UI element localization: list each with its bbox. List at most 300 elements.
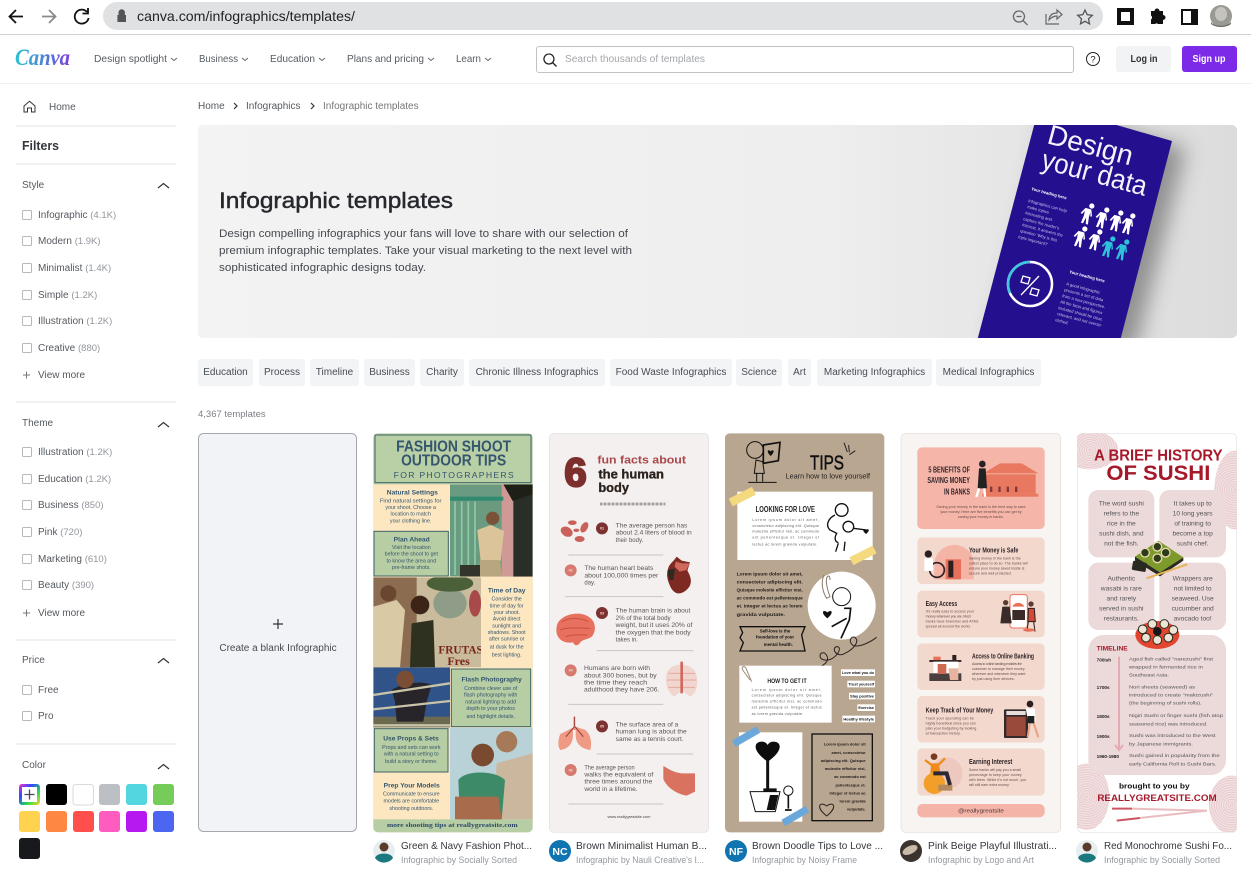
row: access to online banking: wherever and whenever they want <box>972 672 1025 676</box>
flyer body text: topic important?' <box>1018 234 1049 247</box>
flyer headline: Design <box>1044 119 1137 171</box>
tag list: Healthy lifestyle <box>843 717 874 721</box>
fact text: avocado too! <box>1174 615 1212 622</box>
category chips: Process <box>264 367 300 378</box>
card: how to get it: molestie efficitur nisi, ac commodo <box>752 700 822 704</box>
flyer body text: presents a set of data <box>1064 287 1105 303</box>
timeline: wrapped in fermented rice in <box>1129 664 1203 670</box>
fact text: It takes up to <box>1174 500 1212 507</box>
menu items: Learn <box>456 53 481 65</box>
icon: help: ? <box>1090 54 1096 66</box>
filter group: style: Creative (880) <box>38 343 100 354</box>
flyer body text: interest, it answers the <box>1022 222 1064 238</box>
flyer body text: included should be clear, <box>1058 305 1104 322</box>
fact text: The average person <box>584 765 635 771</box>
caption: card 1: Infographic by Socially Sorted <box>401 855 517 866</box>
caption: card 5: Red Monochrome Sushi Fo... <box>1104 840 1232 852</box>
row: your money is safe: secure and well protected. <box>969 571 1012 575</box>
body text block <box>737 572 803 617</box>
fact text: not the fish. <box>1104 540 1139 547</box>
card: heart plant <box>739 732 802 822</box>
sidebar filters <box>16 101 176 859</box>
row: your money is safe: Saving money in the bank is the <box>969 556 1021 560</box>
category chips: Art <box>793 367 806 378</box>
arrow <box>1115 657 1123 750</box>
fact text: refers to the <box>1104 510 1139 517</box>
hero heading: Infographic templates <box>219 188 453 213</box>
tip text: Plan Ahead <box>394 536 430 543</box>
icon: zoom out <box>1013 11 1028 25</box>
photo: man on street <box>450 484 533 577</box>
category chips: Food Waste Infographics <box>616 367 726 378</box>
flyer body text: Your heading here <box>1069 269 1106 284</box>
timeline: introduced to create "makizushi" <box>1129 692 1213 698</box>
number badges: 06 <box>569 768 573 772</box>
tip text: location to match <box>391 512 431 518</box>
filter group: price <box>22 655 169 722</box>
category chips: Charity <box>426 367 458 378</box>
framed note: lorem gravida <box>840 798 866 803</box>
hero block: Saving your money in the bank is the best way to save <box>936 505 1026 509</box>
flyer body text: interesting and <box>1025 210 1053 222</box>
illustration: woman <box>976 461 987 497</box>
fact text <box>1099 500 1214 622</box>
fact text: sushi chef. <box>1177 540 1209 547</box>
row: earning interest: with them. While it's not much, you <box>969 778 1026 782</box>
menu items: Design spotlight <box>94 53 167 65</box>
avatar <box>1210 5 1232 27</box>
website: www.reallygreatsite.com <box>608 814 651 819</box>
caption: card 3 <box>725 840 883 866</box>
row: earning interest: Some banks will pay you a small <box>969 768 1021 772</box>
tip text: Prep Your Models <box>384 783 440 790</box>
icon: forward arrow <box>42 10 56 23</box>
fact text: human lung is about the <box>616 730 687 736</box>
photo: woman on railing <box>373 667 450 727</box>
tip text: best lighting. <box>492 653 522 659</box>
breadcrumb: Home <box>198 101 225 112</box>
template count: 4,367 templates <box>198 409 266 420</box>
tip text: Communicate to ensure <box>383 791 440 797</box>
heading: TIPS <box>810 451 844 474</box>
flyer headline <box>1039 125 1146 196</box>
row: easy access: Easy Access <box>926 599 957 608</box>
card: how to get it: est pellentesque et. Integer et lectus <box>752 705 822 709</box>
tip text: Combine clever use of <box>464 686 518 692</box>
timeline: 1700s <box>1097 685 1110 690</box>
row: your money is safe <box>917 537 1045 584</box>
card: how to get it: consectetur adipiscing elit. Quisque <box>752 694 822 698</box>
framed note <box>812 734 872 821</box>
framed note: molestie efficitur nisi, <box>825 766 866 771</box>
number badges: 03 <box>600 611 604 615</box>
flyer headline: your data <box>1038 144 1151 202</box>
fact text: Humans are born with <box>584 666 650 672</box>
icon: back arrow <box>10 10 23 23</box>
tip text: models are comfortable <box>383 799 439 805</box>
photo: couple by mural <box>373 575 483 668</box>
tip text: Time of Day <box>488 588 526 595</box>
hero block: SAVING MONEY <box>927 476 970 485</box>
tip text: Use Props & Sets <box>383 736 439 743</box>
row: earning interest <box>917 748 1045 796</box>
filter group: theme: View more <box>38 608 85 619</box>
body text block: ac commodo est pellentesque <box>737 596 803 601</box>
fact text: The surface area of a <box>616 723 679 729</box>
timeline: Aged fish called "narezushi" first <box>1129 657 1214 663</box>
ribbon note: mental health. <box>764 642 793 647</box>
heading <box>786 451 870 481</box>
framed note: Integer et lectus ac <box>830 790 866 795</box>
heading: body <box>598 481 629 495</box>
card: looking for love: Lorem ipsum dolor sit amet, <box>752 518 819 522</box>
caption: card 1: Green & Navy Fashion Phot... <box>401 840 532 852</box>
corner patterns <box>1077 434 1237 832</box>
icon: side panel <box>1181 9 1198 25</box>
illustration: ribcage <box>666 662 697 697</box>
card: how to get it: Lorem ipsum dolor sit amet, <box>752 688 822 692</box>
tip text: pre-frame shots. <box>392 565 431 571</box>
search box <box>536 46 1074 72</box>
fact text: about 300 bones, but by <box>584 673 657 679</box>
filter group: style: View more <box>38 370 85 381</box>
tip text: Consider the <box>492 597 522 603</box>
url: canva.com/infographics/templates/ <box>137 8 355 24</box>
filter group: theme: Illustration (1.2K) <box>38 447 112 458</box>
icon: people pictogram <box>1071 201 1136 261</box>
filter group: theme <box>22 418 169 619</box>
row: access to online banking: Access to Online Banking <box>972 651 1034 660</box>
tag list: Trust yourself <box>848 682 875 686</box>
menu items <box>94 53 491 65</box>
filter group: style: Infographic (4.1K) <box>38 210 116 221</box>
template 5: history of sushi <box>1077 433 1237 832</box>
illustration: blood cells <box>559 520 590 542</box>
chopsticks <box>1112 809 1207 821</box>
filter group: theme: Marketing (610) <box>38 554 107 565</box>
fact text: the time they reach <box>584 681 647 687</box>
caption: card 4 <box>900 840 1057 866</box>
tip text: natural lighting to add <box>465 699 516 705</box>
filter group: theme: Beauty (390) <box>38 580 94 591</box>
hero block: 5 BENEFITS OF <box>928 465 970 474</box>
card: looking for love: lectus ac lorem gravida vulputate. <box>752 542 817 546</box>
illustration: foot <box>663 766 695 796</box>
sign up button <box>1182 46 1237 72</box>
number badges: 04 <box>569 669 574 673</box>
Canva logo: Canva <box>15 45 70 70</box>
address bar <box>103 2 1103 30</box>
illustration: safe <box>924 545 974 579</box>
fact text: not limited to <box>1174 585 1212 592</box>
ribbon note: foundation of your <box>756 635 794 640</box>
heading: the human <box>598 468 664 482</box>
icon: extension square <box>1117 8 1134 25</box>
filter group: style: Minimalist (1.4K) <box>38 263 111 274</box>
fact text: three times around the <box>584 780 653 786</box>
breadcrumb: Infographic templates <box>323 101 419 112</box>
fact text: become a top <box>1172 530 1213 537</box>
row: easy access <box>917 591 1045 637</box>
flyer body text: etched. <box>1055 317 1069 326</box>
timeline: Sushi was introduced to the West <box>1129 733 1216 739</box>
row: your money is safe: ensure your money saved inside is <box>969 566 1025 570</box>
tip text: at dusk for the <box>490 645 524 651</box>
illustration: heart <box>667 557 691 593</box>
card: looking for love: consectetur adipiscing elit. Quisque <box>752 524 819 528</box>
tip text: Natural Settings <box>387 489 438 496</box>
fact text: The human heart beats <box>584 566 653 572</box>
timeline: Sushi gained in popularity from the <box>1129 753 1220 759</box>
tip text: your clothing line. <box>390 518 431 524</box>
filter group: price: Price <box>22 655 45 666</box>
icon: home <box>24 101 35 112</box>
fact text: world in a lifetime. <box>583 787 638 793</box>
category chips: Medical Infographics <box>943 367 1034 378</box>
tag list: Stay positive <box>850 694 874 698</box>
fact text: day. <box>584 581 596 587</box>
framed note: ac commodo est <box>834 774 866 779</box>
card: how to get it <box>739 666 832 723</box>
template 1: fashion shoot <box>373 433 533 832</box>
framed note: vulputate. <box>847 806 866 811</box>
tape strips yellow <box>729 487 877 565</box>
fact text: same as a tennis court. <box>616 737 684 743</box>
body text block: et. Integer et lectus ac lorem <box>737 604 803 609</box>
heading <box>564 451 686 495</box>
body text block: Quisque molestie efficitur nisi, <box>737 588 803 593</box>
fact text: walks the equivalent of <box>583 773 654 779</box>
row: keep track of your money <box>917 696 1045 743</box>
tip text: before the shoot to get <box>385 552 439 558</box>
template 3: doodle tips <box>725 433 884 832</box>
create blank card: Create a blank Infographic <box>219 643 337 654</box>
timeline: Southeast Asia. <box>1129 673 1169 679</box>
hero block: saving your money in banks. <box>958 515 1004 519</box>
captions <box>373 840 1232 866</box>
log in button: Log in <box>1130 53 1158 65</box>
row: access to online banking: Access to online banking enables the <box>972 662 1022 666</box>
flyer body text <box>1018 186 1106 328</box>
fact text: rice in the <box>1107 520 1136 527</box>
category chips: Marketing Infographics <box>824 367 925 378</box>
hero description <box>219 228 632 274</box>
log in button <box>1116 46 1171 72</box>
home link: Home <box>49 102 76 113</box>
tip text: sunlight and <box>492 623 521 629</box>
browser toolbar <box>0 0 1251 34</box>
category chips: Science <box>741 367 777 378</box>
fact text: The human brain is about <box>616 609 691 615</box>
caption: card 3: Brown Doodle Tips to Love ... <box>752 840 883 852</box>
flyer body text: from a new perspective. <box>1062 293 1106 309</box>
caption: card 3: Infographic by Noisy Frame <box>752 855 857 866</box>
framed note: Lorem ipsum dolor sit <box>824 742 866 747</box>
card: looking for love: molestie efficitur nisi, ac commodo <box>752 530 819 534</box>
footer: REALLYGREATSITE.COM <box>1097 793 1217 803</box>
icon: search <box>544 54 556 66</box>
fact text: adulthood they have 206. <box>584 688 660 694</box>
tip text: and highlight details. <box>466 714 515 720</box>
fact text: the oxygen that the body <box>616 630 691 636</box>
timeline: Nigiri Sushi or finger sushi (fish atop <box>1129 713 1223 719</box>
hero description: premium infographic templates. Take your visual marketing to the next level with <box>219 245 632 257</box>
timeline: by Japanese immigrants. <box>1129 741 1193 747</box>
template 4: saving money in banks <box>901 433 1061 832</box>
tip text: Props and sets can work <box>382 745 441 751</box>
tip text: with a natural setting to <box>384 752 439 758</box>
fact text: sushi dish, and <box>1099 530 1144 537</box>
card: looking for love: LOOKING FOR LOVE <box>756 505 815 514</box>
framed note: pellentesque et. <box>836 782 866 787</box>
create blank card <box>198 434 356 832</box>
filter group: theme: Pink (720) <box>38 527 82 538</box>
timeline: early California Roll to Sushi Bars. <box>1129 761 1216 767</box>
hero description: Design compelling infographics your fans will love to share with our selection of <box>219 228 629 240</box>
filter group: price: Pro <box>38 711 54 722</box>
fact text: weight, but it uses 20% of <box>615 623 693 629</box>
filter group: style: Illustration (1.2K) <box>38 316 112 327</box>
fact text: cucumber and <box>1172 605 1214 612</box>
row: easy access: banks have branches and ATMs <box>926 620 979 624</box>
fact text: of training to <box>1174 520 1211 527</box>
timeline: 1960-1980 <box>1097 754 1119 759</box>
illustration: sushi tray <box>1132 541 1187 578</box>
hero block: IN BANKS <box>944 488 970 497</box>
filter group: theme: Business (850) <box>38 500 104 511</box>
fact text: seaweed. Use <box>1172 595 1214 602</box>
timeline: 1900s <box>1097 734 1110 739</box>
menu items: Plans and pricing <box>347 53 424 65</box>
row: keep track of your money: at transaction history. <box>926 731 961 735</box>
card: how to get it: HOW TO GET IT <box>767 678 807 685</box>
category chips: Education <box>203 367 248 378</box>
search box: Search thousands of templates <box>565 54 705 65</box>
icon: share <box>1046 10 1062 24</box>
row: keep track of your money: Track your spending can be <box>926 716 974 720</box>
row: keep track of your money: highly beneficial since you can <box>926 721 976 725</box>
heading: A BRIEF HISTORY <box>1094 448 1223 465</box>
caption: card 5 <box>1076 840 1232 866</box>
tip text: your shoot. <box>493 610 520 616</box>
flyer body text: A good infographic <box>1066 281 1101 295</box>
breadcrumb: Infographics <box>246 101 300 112</box>
filter group: theme: Education (1.2K) <box>38 474 111 485</box>
row: earning interest: percentage to keep your money <box>969 773 1022 777</box>
header <box>375 435 531 483</box>
illustration: brain <box>556 614 595 645</box>
caption: card 2: Infographic by Nauli Creative's I... <box>576 855 704 866</box>
fact text: wasabi is rare <box>1100 585 1142 592</box>
row: keep track of your money: plan your budgeting by looking <box>926 726 976 730</box>
breadcrumb <box>198 101 419 112</box>
fact text: their body. <box>616 538 644 544</box>
illustration: desk <box>929 655 961 681</box>
caption: card 5: Infographic by Socially Sorted <box>1104 855 1220 866</box>
tip text: after sunrise or <box>489 637 525 643</box>
handle pill <box>917 804 1045 817</box>
tip text <box>380 489 526 812</box>
row: access to online banking: by just using their devices. <box>972 677 1015 681</box>
illustration: bank <box>982 463 1038 497</box>
framed note: amet, consectetur <box>832 750 866 755</box>
header: FOR PHOTOGRAPHERS <box>394 470 514 480</box>
category chips <box>198 359 1041 386</box>
hero description: sophisticated infographic designs today. <box>219 262 426 274</box>
tip text: depth to your photos <box>466 706 515 712</box>
filters heading: Filters <box>22 139 59 153</box>
photo: couple by mural: Fres <box>447 654 470 668</box>
caption: card 4: Infographic by Logo and Art <box>928 855 1034 866</box>
icon: extension puzzle <box>1151 8 1166 24</box>
tip text: Find natural settings for <box>380 498 442 504</box>
card: looking for love <box>737 492 873 560</box>
handle pill: @reallygreatsite <box>958 809 1004 815</box>
heading <box>1094 448 1223 485</box>
fact boxes <box>1088 490 1226 775</box>
filter group: theme: Theme <box>22 418 54 429</box>
curly line <box>810 637 877 670</box>
illustration: phone and people <box>1000 595 1035 632</box>
number badges <box>565 522 608 776</box>
row: your money is safe: Your Money is Safe <box>969 546 1018 555</box>
card: how to get it: ac lorem gravida vulputate. <box>752 712 803 716</box>
tip text: Avoid direct <box>493 617 521 623</box>
menu items: Business <box>199 53 238 65</box>
body text block: consectetur adipiscing elit. <box>737 580 803 585</box>
fact text: Authentic <box>1107 575 1136 582</box>
row: easy access: money wherever you are. Most <box>926 615 971 619</box>
tag list <box>841 669 875 722</box>
heading: fun facts about <box>597 454 686 466</box>
caption: card 3: NF <box>729 846 744 858</box>
caption: card 1 <box>373 840 532 866</box>
illustration: calculator and woman <box>1004 701 1038 738</box>
body text block: gravida vulputate. <box>737 612 785 617</box>
tip text: build a story or theme. <box>385 759 438 765</box>
card: looking for love: est pellentesque et. Integer et <box>752 536 819 540</box>
flyer body text: relevant, and not overstr- <box>1057 311 1104 328</box>
row: earning interest: Earning Interest <box>969 757 1013 766</box>
row: access to online banking <box>917 643 1045 690</box>
timeline: seasoned rice) was introduced. <box>1129 721 1208 727</box>
circle doodle <box>808 572 876 640</box>
timeline: 1800s <box>1097 714 1110 719</box>
row: keep track of your money: Keep Track of Your Money <box>926 706 994 715</box>
sign up button: Sign up <box>1192 53 1226 65</box>
photo: couple by mural: FRUTAS <box>438 644 483 656</box>
icon: paperclip <box>742 667 752 682</box>
row: access to online banking: customer to manage their money <box>972 667 1025 671</box>
timeline: TIMELINE <box>1097 646 1128 653</box>
filter group: color swatches: Color <box>22 760 47 771</box>
flyer body text: Infographics can help <box>1028 198 1068 213</box>
footer text: more shooting tips at reallygreatsite.com <box>387 822 519 829</box>
flyer body text: make topics <box>1027 204 1050 215</box>
header: OUTDOOR TIPS <box>401 453 506 470</box>
fact text: and rarely <box>1107 595 1137 602</box>
dividers <box>565 555 693 804</box>
heading: OF SUSHI <box>1106 460 1210 485</box>
fact text: takes in. <box>616 638 638 644</box>
footer <box>1097 781 1217 803</box>
footer: brought to you by <box>1119 781 1190 790</box>
caption: card 4: Pink Beige Playful Illustrati... <box>928 840 1057 852</box>
row: your money is safe: safest place to do so. The banks will <box>969 561 1028 565</box>
filter group: color swatches <box>19 760 174 859</box>
category chips: Timeline <box>316 367 354 378</box>
caption: card 2: NC <box>552 846 568 858</box>
